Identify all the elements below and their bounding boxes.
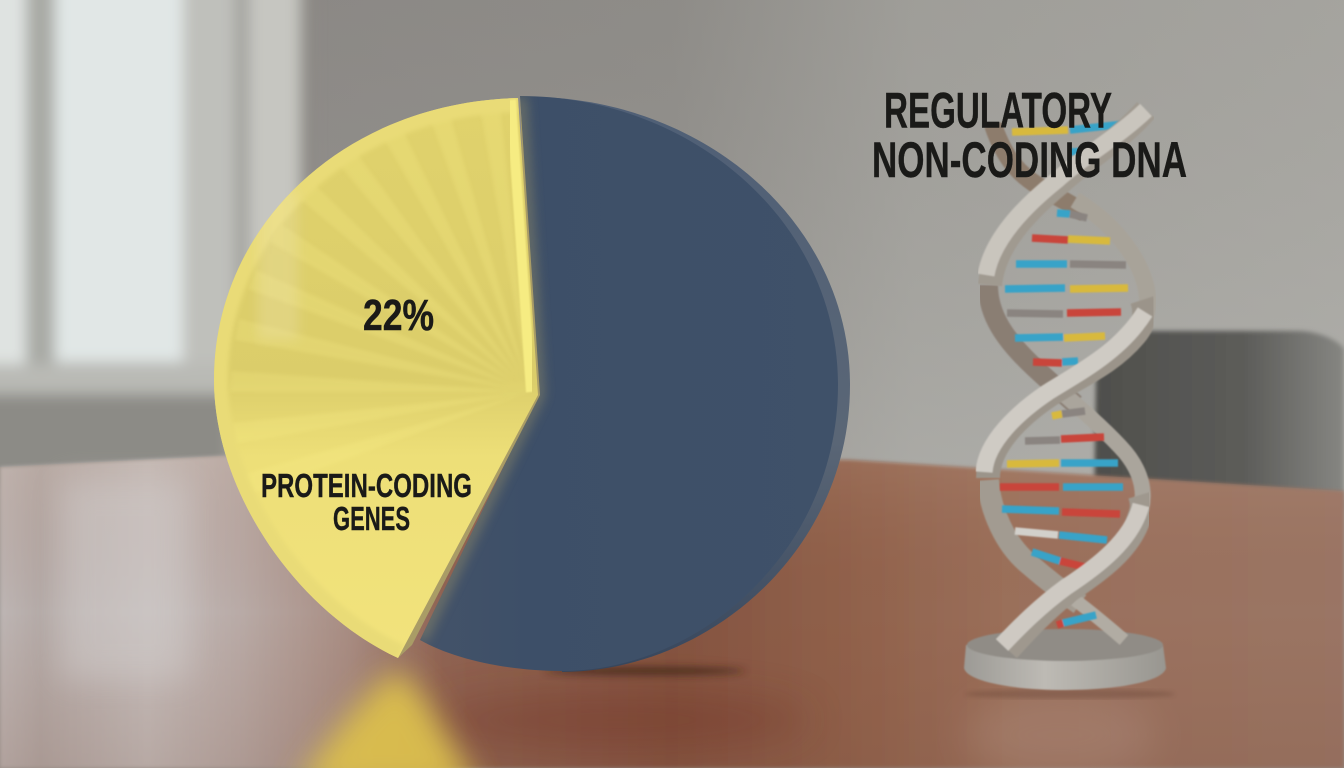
table [0,456,1344,768]
front strand: lower [1002,495,1142,650]
front strand: middle [984,300,1145,478]
helix base [964,629,1166,690]
front strand: upper [986,110,1146,285]
label: regulatory non-coding DNA: NON-CODING DNA [872,132,1187,188]
label: 22%: 22% [363,291,434,340]
bright edge [511,100,531,392]
label: protein-coding genes [261,467,472,537]
label: regulatory non-coding DNA: REGULATORY [884,82,1112,138]
outer rim [214,98,518,658]
label: protein-coding genes: PROTEIN-CODING [261,467,472,504]
base-pair rungs [1000,124,1128,625]
label: protein-coding genes: GENES [333,500,410,537]
window reflection [258,190,298,340]
background: room wall and window [0,0,1344,500]
pie chart [214,94,850,672]
pie slice: protein-coding genes (yellow) [214,94,540,658]
label: regulatory non-coding DNA [872,82,1187,188]
DNA helix model [964,110,1166,690]
pie slice: regulatory non-coding DNA (blue) [420,96,850,672]
back strand segments [988,125,1148,640]
background: chair [1094,331,1344,510]
light rays [230,94,530,495]
